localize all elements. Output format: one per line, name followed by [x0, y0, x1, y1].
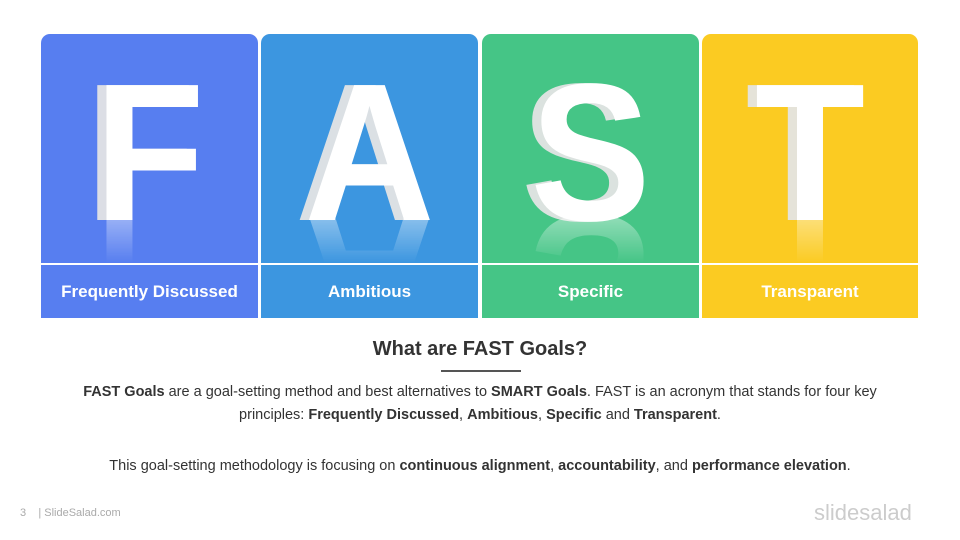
panel: T: [702, 34, 918, 318]
logo: slidesalad: [814, 500, 912, 525]
panel: A: [261, 34, 478, 318]
footer: 3 | SlideSalad.com: [20, 507, 121, 519]
panel: T: T: [755, 43, 865, 262]
text block: description: FAST Goals are a goal-setting method and best alternatives to SMART Goals. FAST is an acronym that stands for four key principles: Frequently Discussed, Ambitious, Specific and Transparent.: [83, 384, 877, 423]
text block: methodology: This goal-setting methodology is focusing on continuous alignment, accountability, and performance elevation.: [109, 458, 851, 474]
label: Frequently Discussed: Frequently Discussed: [61, 282, 238, 301]
panel: S: S: [530, 43, 651, 262]
label: Ambitious: Ambitious: [328, 282, 411, 301]
panel: A: A: [304, 43, 435, 262]
panel: F: [41, 34, 258, 318]
label: Specific: Specific: [558, 282, 623, 301]
title: What are FAST Goals?: [373, 338, 587, 360]
panel: F: F: [94, 43, 205, 262]
title underline: [441, 370, 521, 372]
label: Transparent: Transparent: [761, 282, 859, 301]
panel: S: [482, 34, 699, 318]
